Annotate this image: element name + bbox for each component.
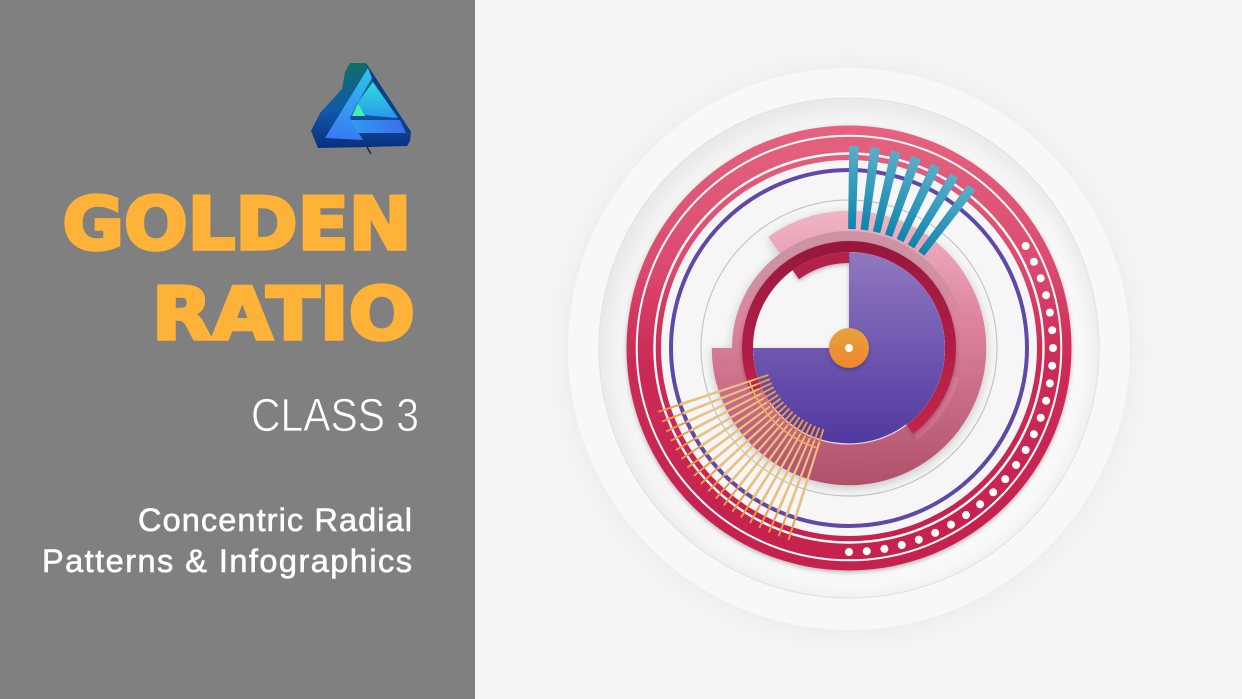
- panel: left title panel: [0, 0, 475, 699]
- orange radial fan: [658, 374, 825, 540]
- text: Concentric Radial: Concentric Radial: [138, 502, 412, 538]
- crimson ring: [747, 247, 950, 429]
- dotted ring: [845, 241, 1057, 556]
- heading: GOLDEN: GOLDEN: [62, 182, 412, 266]
- text: Patterns & Infographics: Patterns & Infographics: [42, 543, 412, 579]
- text: CLASS 3: CLASS 3: [251, 389, 419, 441]
- thin grey ring: [701, 200, 997, 496]
- thin inner highlight: [770, 403, 906, 444]
- heading: RATIO: RATIO: [152, 272, 415, 356]
- icon: Affinity Designer logo: [311, 63, 411, 154]
- white centre quadrant: [753, 252, 945, 444]
- inner recessed disc: [597, 98, 1101, 604]
- purple sector: [753, 252, 945, 444]
- outer raised disc: [568, 68, 1130, 630]
- lower right highlight arc: [916, 377, 956, 436]
- blue radial bars: [847, 146, 976, 256]
- panel: radial infographic: [598, 98, 1100, 598]
- pink outer arc: [722, 221, 976, 475]
- purple ring: [671, 170, 1027, 526]
- page background: [475, 0, 1242, 699]
- concentric red bands: [626, 126, 1072, 570]
- centre orange disc: [829, 328, 869, 368]
- crimson wedge: [793, 252, 849, 279]
